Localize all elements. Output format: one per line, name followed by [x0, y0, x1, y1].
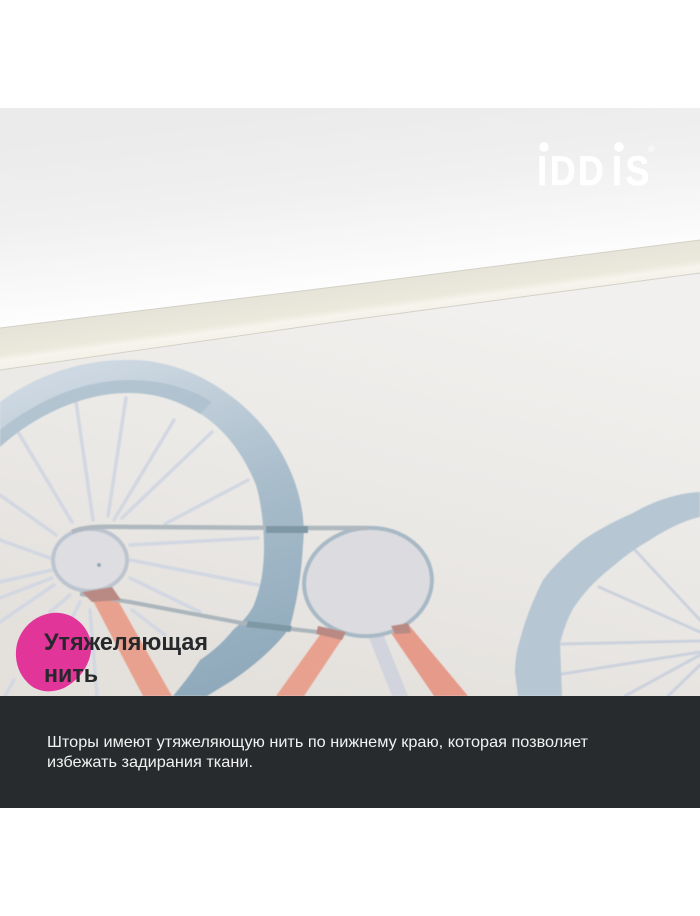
chain stay [389, 624, 468, 696]
front-left frame tube [90, 590, 172, 696]
front wheel rim [515, 492, 700, 696]
rear wheel rim [0, 360, 304, 696]
heading second line: нить [44, 661, 98, 688]
chain top run [72, 527, 368, 532]
first i dot [539, 142, 549, 152]
hem edges [0, 240, 700, 370]
rim inner darker band [0, 380, 212, 447]
hub axle [97, 563, 101, 567]
curtain cloth [0, 273, 700, 696]
dark band [0, 696, 700, 808]
rear wheel spokes [0, 398, 258, 696]
registered mark: ® [648, 144, 655, 154]
callout: weighted thread label [16, 613, 208, 691]
logo: IDDIS [537, 142, 655, 195]
chainring [299, 522, 437, 642]
caption panel [0, 696, 700, 808]
description line 1: Шторы имеют утяжеляющую нить по нижнему краю, которая позволяет [47, 734, 589, 751]
chain bottom run [80, 594, 335, 634]
chain overlap marks [246, 526, 308, 632]
bicycle watercolor print [0, 360, 700, 696]
frame tube to chainring [276, 632, 344, 696]
wall background [0, 108, 700, 696]
second i dot [614, 142, 624, 152]
description line 2: избежать задирания ткани. [47, 754, 253, 771]
logo wordmark: IDDIS [537, 148, 649, 195]
curtain hem [0, 240, 700, 370]
rear hub [53, 529, 127, 591]
photo: curtain fabric [0, 108, 700, 696]
front wheel spokes [556, 549, 700, 696]
heading: Утяжеляющая [44, 629, 208, 656]
pink blob [16, 613, 91, 691]
tube joins [82, 587, 411, 640]
seat tube [369, 636, 408, 696]
